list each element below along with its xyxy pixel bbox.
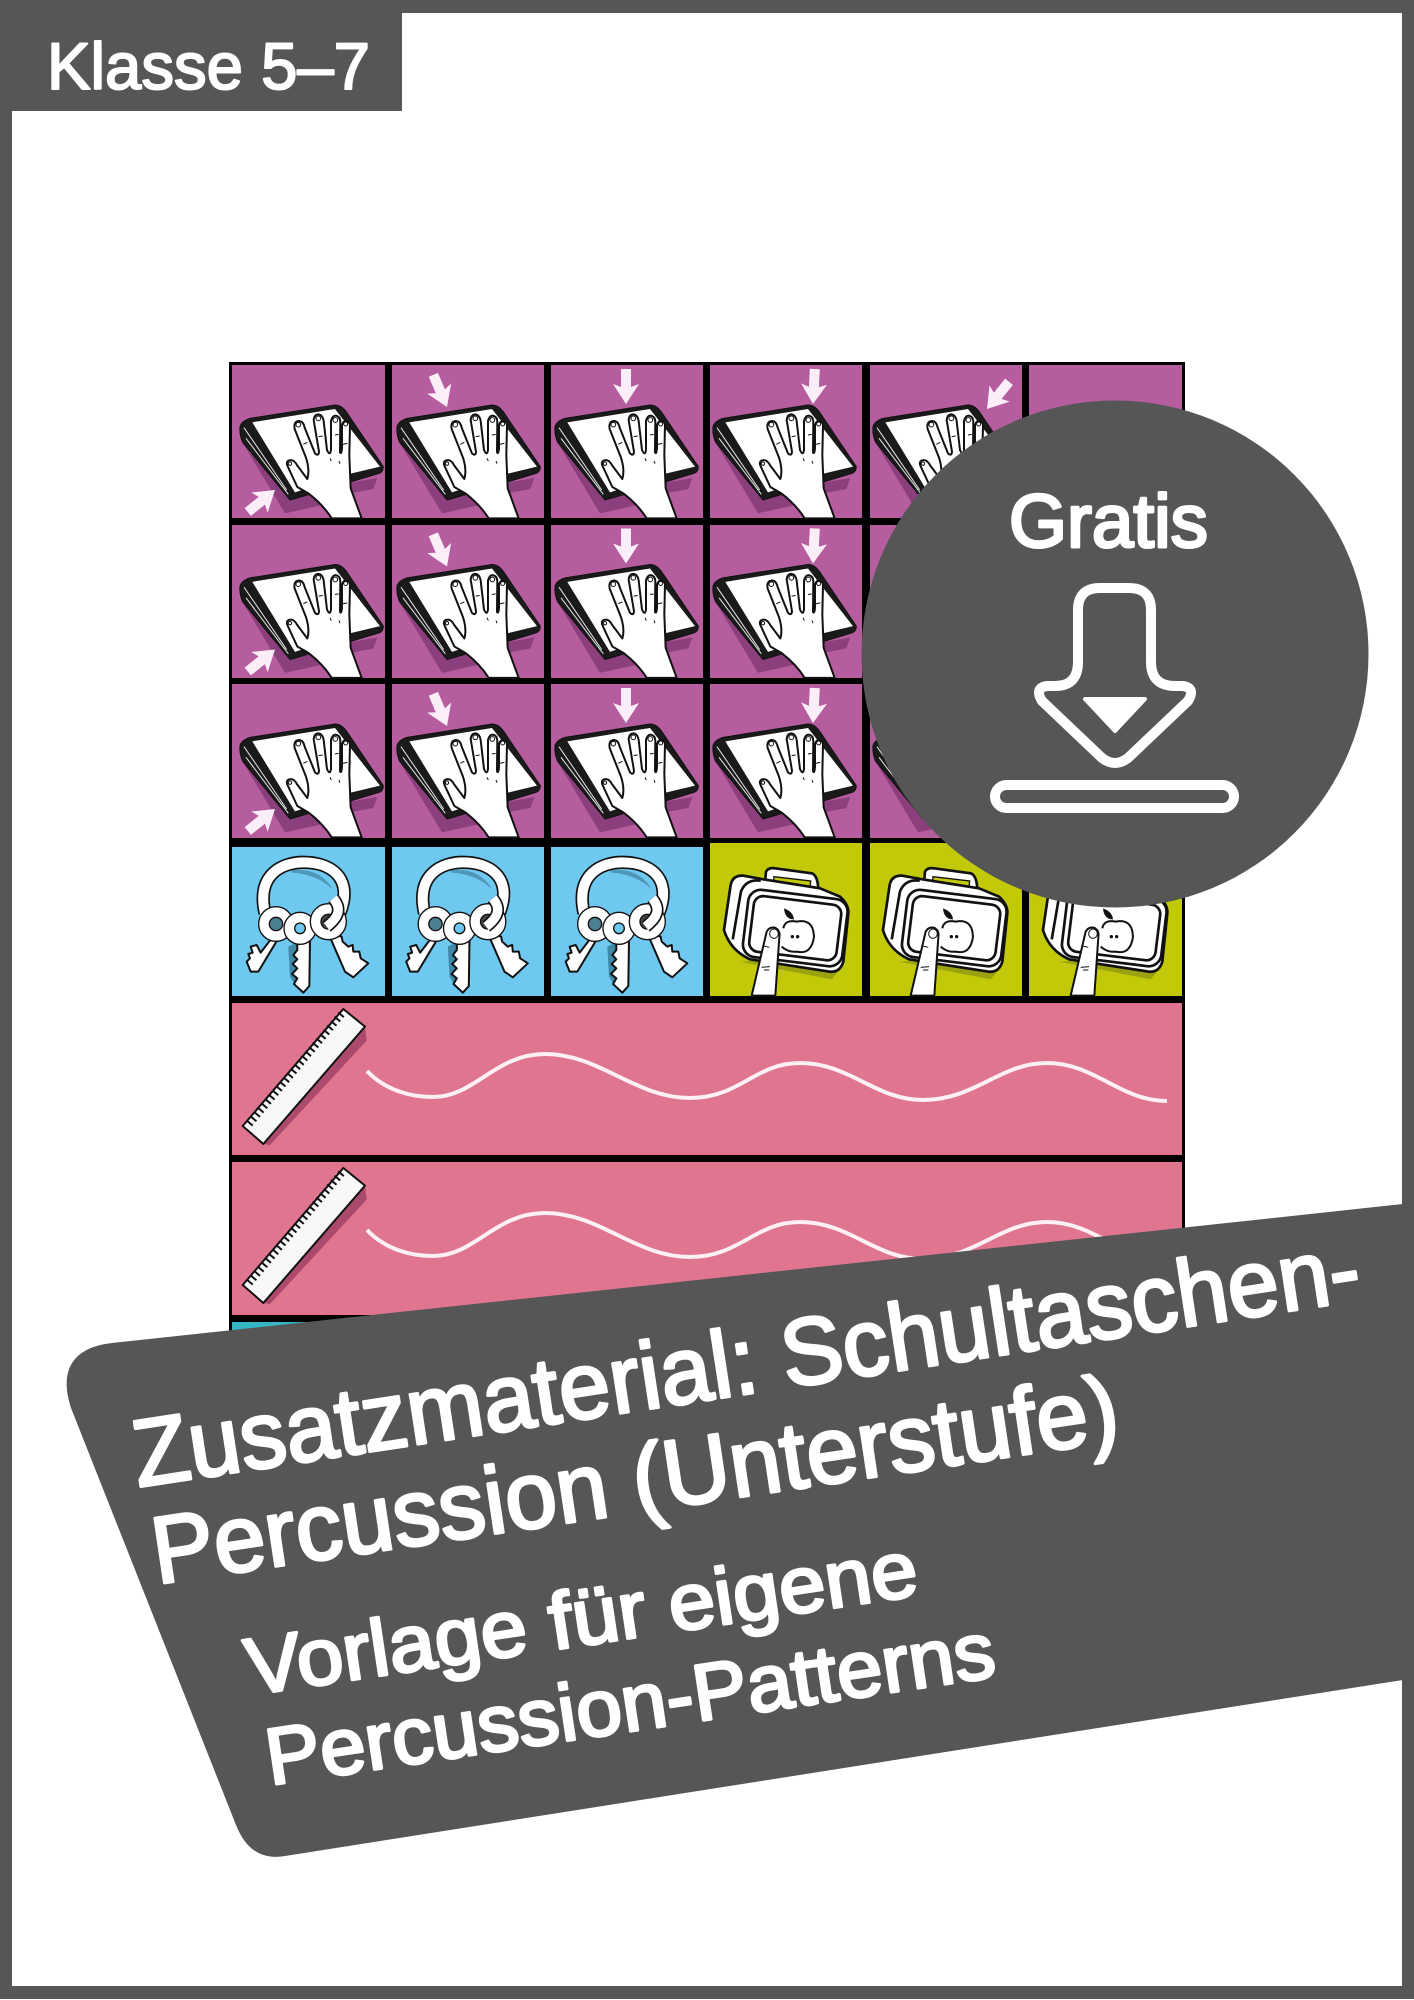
row 1: hand on book xyxy=(232,365,1182,522)
row 3: hand on book xyxy=(232,684,1182,841)
grade tag: Klasse 5–7 xyxy=(47,29,370,103)
free download badge xyxy=(862,400,1368,908)
row 7: teal strip xyxy=(232,1322,1182,1362)
row 6: ruler and wave xyxy=(232,1162,1182,1315)
subtitle: Percussion-Patterns xyxy=(259,1605,1000,1802)
row 2: hand on book xyxy=(232,525,1182,682)
title: Percussion (Unterstufe) xyxy=(144,1356,1125,1605)
row 4: keys and lunchboxes xyxy=(232,843,1182,996)
percussion pattern grid xyxy=(229,362,1185,1362)
title banner xyxy=(67,1204,1403,1857)
subtitle xyxy=(239,1524,1000,1802)
title: Zusatzmaterial: Schultaschen- xyxy=(125,1215,1367,1508)
badge label: Gratis xyxy=(1009,479,1208,563)
subtitle: Vorlage für eigene xyxy=(239,1524,923,1712)
icon: download arrow xyxy=(995,588,1234,808)
row 5: ruler and wave xyxy=(232,1003,1182,1155)
grade tag xyxy=(0,0,402,111)
